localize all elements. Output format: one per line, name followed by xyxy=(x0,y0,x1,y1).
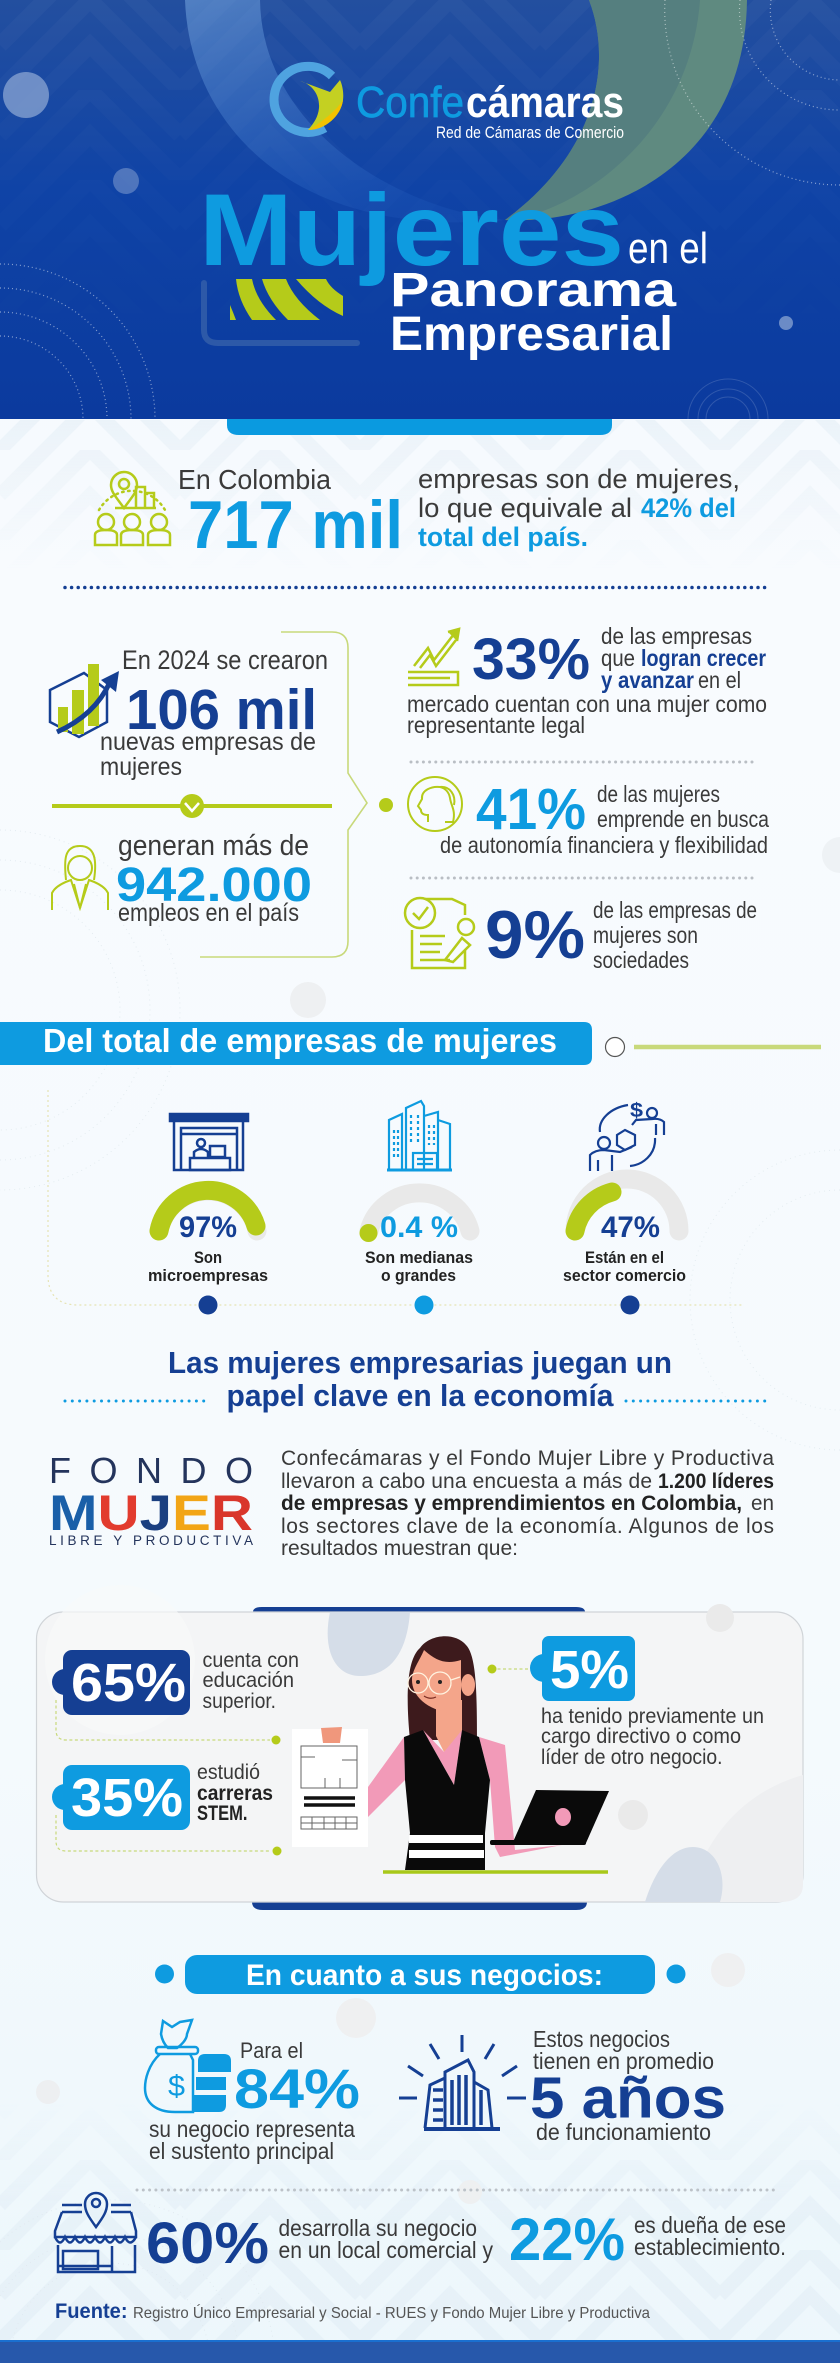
heading pill: en cuanto a sus negocios xyxy=(155,1955,686,1994)
logo: Fondo Mujer: FONDO xyxy=(49,1450,253,1491)
text block: survey description: llevaron a cabo una encuesta a más de xyxy=(281,1470,652,1493)
gauge: 97% microempresas xyxy=(148,1114,268,1314)
text block: survey description xyxy=(281,1447,774,1560)
accent strip xyxy=(227,419,612,435)
title: Mujeres xyxy=(199,173,624,287)
title: Empresarial xyxy=(390,308,673,361)
badge: 65%: educación xyxy=(202,1669,294,1692)
panel: left creation and employment: 942.000 xyxy=(116,859,312,912)
stat: 9% xyxy=(405,897,757,973)
badge: 5% xyxy=(488,1636,764,1769)
badge: 65%: 65% xyxy=(71,1653,186,1713)
panel: left creation and employment: generan más de xyxy=(118,830,309,862)
footer band xyxy=(0,2340,840,2363)
badge: 65% xyxy=(52,1649,299,1744)
source note: Registro Único Empresarial y Social - RUES y Fondo Mujer Libre y Productiva xyxy=(133,2303,650,2322)
header banner xyxy=(0,0,840,435)
stat: 33%: 33% xyxy=(472,627,590,692)
icon: trade exchange xyxy=(590,1105,664,1171)
stat: 41%: de autonomía financiera y flexibilidad xyxy=(440,832,768,858)
stat: 84%: 84% xyxy=(234,2057,360,2120)
stat: 33%: y avanzar xyxy=(601,667,694,693)
stat: 5 años: de funcionamiento xyxy=(536,2119,711,2145)
badge: 5%: líder de otro negocio. xyxy=(541,1746,722,1769)
stat: 41%: de las mujeres xyxy=(597,781,720,807)
text block: survey description: Confecámaras y el Fondo Mujer Libre y Productiva xyxy=(281,1447,774,1470)
stat: 84%: Para el xyxy=(240,2038,303,2063)
stat: 717 mil xyxy=(95,464,740,563)
heading banner: del total de empresas: Del total de empresas de mujeres xyxy=(43,1022,557,1059)
panel: left creation and employment: nuevas empresas de xyxy=(100,728,316,756)
stat: 33%: en el xyxy=(698,667,741,693)
stat: 84%: el sustento principal xyxy=(149,2138,334,2164)
stat: 5 años: tienen en promedio xyxy=(533,2048,714,2074)
logo: Fondo Mujer: MUJER xyxy=(49,1485,253,1541)
source note xyxy=(55,2300,650,2323)
icon: money bag and coins: $ xyxy=(168,2070,185,2103)
stat: 717 mil: total del país. xyxy=(418,522,588,552)
stat: 60% and 22% xyxy=(55,2193,786,2276)
heading banner: del total de empresas xyxy=(0,1022,821,1065)
panel: right percentages xyxy=(405,623,769,973)
gauge: 97% microempresas: Son xyxy=(194,1248,222,1267)
badge: 65%: superior. xyxy=(202,1690,276,1713)
gauge: 0.4% medianas o grandes: Son medianas xyxy=(365,1248,473,1267)
text block: survey description: de empresas y emprendimientos en Colombia, xyxy=(281,1492,742,1515)
icon: title bracket and stripes xyxy=(204,279,357,343)
text block: survey description: en xyxy=(751,1492,774,1515)
stat: 84% xyxy=(145,2020,360,2164)
stat: 60% and 22%: en un local comercial y xyxy=(278,2237,493,2263)
title xyxy=(199,173,708,361)
stat: 60% and 22%: desarrolla su negocio xyxy=(278,2215,477,2241)
icon: growth chart xyxy=(50,664,119,737)
gauge: 0.4% medianas o grandes: 0.4 % xyxy=(380,1211,458,1244)
badge: 35%: carreras xyxy=(197,1782,273,1805)
stat: 84%: su negocio representa xyxy=(149,2116,355,2142)
badge: 65%: cuenta con xyxy=(202,1649,299,1672)
stat: 9%: de las empresas de xyxy=(593,897,757,923)
panel: left creation and employment: mujeres xyxy=(100,753,182,781)
panel: left creation and employment xyxy=(50,632,393,957)
stat: 33%: mercado cuentan con una mujer como xyxy=(407,691,767,717)
badge: 35%: estudió xyxy=(197,1761,260,1784)
logo: Confecámaras xyxy=(274,66,624,142)
panel: left creation and employment: 106 mil xyxy=(126,678,317,742)
stat: 60% and 22%: es dueña de ese xyxy=(634,2212,786,2238)
divider with check xyxy=(52,794,332,818)
title: en el xyxy=(628,224,708,273)
stat: 60% and 22%: 22% xyxy=(509,2206,625,2273)
logo: Fondo Mujer xyxy=(49,1450,253,1548)
logo: Confecámaras: Confe xyxy=(356,78,464,127)
stat: 717 mil: empresas son de mujeres, xyxy=(418,464,740,494)
panel: left creation and employment: empleos en el país xyxy=(118,899,299,927)
stat: 33%: de las empresas xyxy=(601,623,752,649)
stat: 5 años: 5 años xyxy=(530,2066,726,2131)
gauge: 47% sector comercio: sector comercio xyxy=(563,1266,686,1285)
stat: 60% and 22%: establecimiento. xyxy=(634,2234,786,2260)
badge: 5%: ha tenido previamente un xyxy=(541,1705,764,1728)
stat: 717 mil: lo que equivale al xyxy=(418,493,632,523)
icon: storefront with pin xyxy=(55,2193,136,2272)
stat: 717 mil: En Colombia xyxy=(178,464,331,495)
stat: 717 mil: 717 mil xyxy=(188,487,403,563)
source note: Fuente: xyxy=(55,2300,128,2323)
heading: mujeres empresarias: Las mujeres empresarias juegan un xyxy=(168,1345,672,1380)
stat: 60% and 22%: 60% xyxy=(146,2211,269,2276)
badge: 5%: cargo directivo o como xyxy=(541,1725,741,1748)
gauge: 47% sector comercio: $ xyxy=(630,1100,643,1122)
icon: money bag and coins xyxy=(145,2020,231,2112)
heading: mujeres empresarias xyxy=(65,1345,770,1413)
stat: 41% xyxy=(408,777,769,858)
logo: Fondo Mujer: LIBRE Y PRODUCTIVA xyxy=(49,1533,253,1548)
gauge: 47% sector comercio xyxy=(563,1100,686,1314)
icon: small shop xyxy=(170,1114,248,1170)
logo: Confecámaras: Red de Cámaras de Comercio xyxy=(436,123,624,142)
gauge: 0.4% medianas o grandes xyxy=(360,1101,473,1314)
text block: survey description: los sectores clave de la economía. Algunos de los xyxy=(281,1515,774,1538)
stat: 33%: que xyxy=(601,645,635,671)
stat: 9%: mujeres son xyxy=(593,922,698,948)
stat: 9%: 9% xyxy=(485,897,585,973)
stat: 9%: sociedades xyxy=(593,947,689,973)
gauge: 97% microempresas: 97% xyxy=(179,1211,237,1244)
icon: city building with rays xyxy=(399,2035,526,2129)
text block: survey description: resultados muestran que: xyxy=(281,1537,518,1560)
heading: mujeres empresarias: papel clave en la economía xyxy=(226,1378,614,1413)
badge: 35%: 35% xyxy=(71,1768,183,1828)
logo: Confecámaras: cámaras xyxy=(466,78,624,127)
panel: left creation and employment: En 2024 se crearon xyxy=(122,645,328,675)
badge: 35%: STEM. xyxy=(197,1802,248,1825)
stat: 33%: representante legal xyxy=(407,712,585,738)
stat: 5 años: Estos negocios xyxy=(533,2026,670,2052)
gauge: 47% sector comercio: Están en el xyxy=(585,1248,664,1267)
stat: 33%: logran crecer xyxy=(641,645,766,671)
panel: gauges xyxy=(148,1100,686,1314)
stat: 33% xyxy=(407,623,767,738)
stat: 717 mil: 42% del xyxy=(641,493,736,523)
illustration: woman with plan and laptop xyxy=(292,1636,609,1872)
stat: 5 años xyxy=(399,2026,726,2145)
icon: location and people xyxy=(95,472,170,545)
stat: 41%: emprende en busca xyxy=(597,806,769,832)
stat: 41%: 41% xyxy=(476,777,586,842)
gauge: 0.4% medianas o grandes: o grandes xyxy=(381,1266,456,1285)
icon: businesswoman xyxy=(52,846,108,910)
gauge: 47% sector comercio: 47% xyxy=(601,1211,660,1244)
heading pill: en cuanto a sus negocios: En cuanto a sus negocios: xyxy=(246,1959,603,1992)
logo mark xyxy=(274,66,343,132)
panel: woman profile survey xyxy=(36,1585,803,1910)
gauge: 97% microempresas: microempresas xyxy=(148,1266,268,1285)
title: Panorama xyxy=(390,264,676,317)
badge: 5%: 5% xyxy=(550,1640,629,1700)
badge: 35% xyxy=(52,1761,282,1856)
text block: survey description: 1.200 líderes xyxy=(658,1470,774,1493)
icon: tall buildings xyxy=(387,1101,452,1170)
